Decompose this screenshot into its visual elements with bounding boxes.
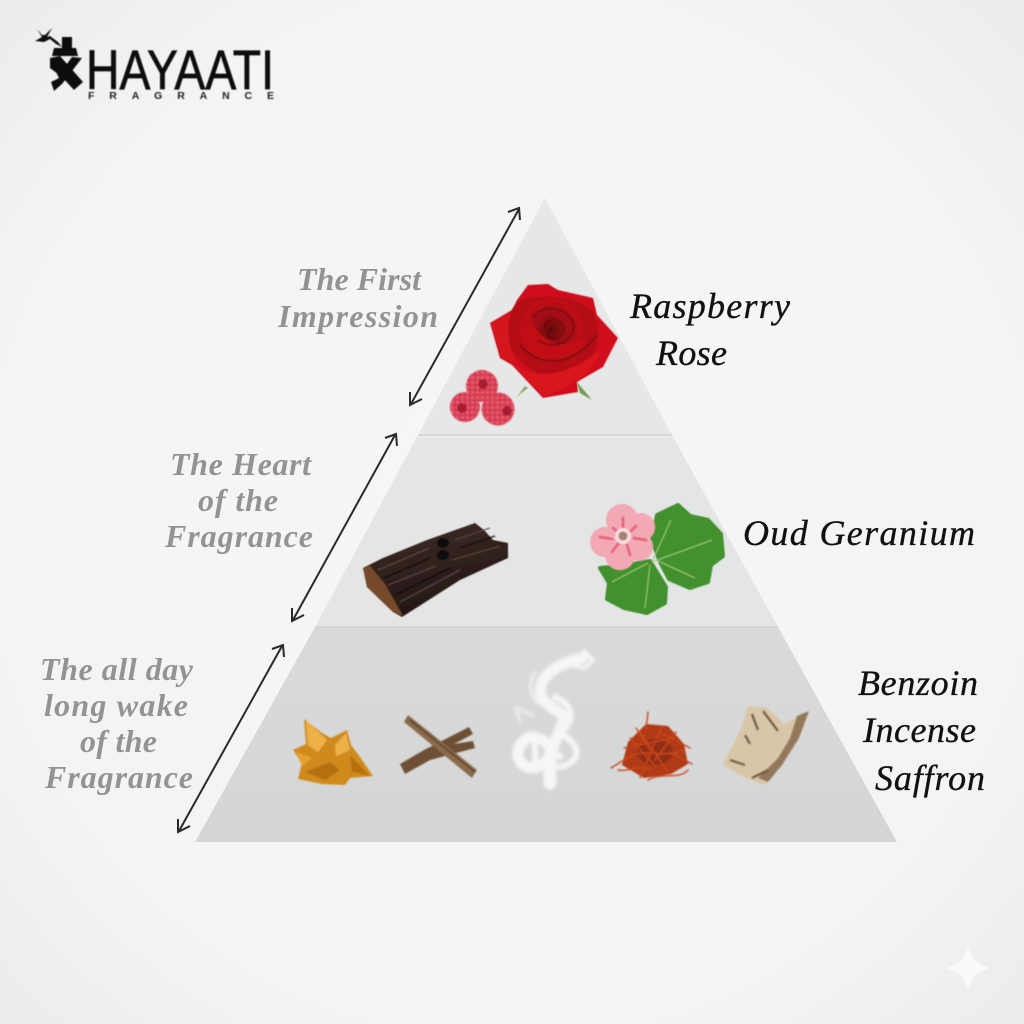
label: The First Impression: Impression [277,298,438,334]
label: The Heart of the Fragrance [164,446,313,554]
icon: rose [490,284,618,400]
label: The all day long wake of the Fragrance: The all day [40,651,194,687]
watermark sparkle [946,946,990,990]
label: The First Impression [277,261,438,334]
notes: Raspberry Rose: Rose [655,333,727,373]
logo wordmark: HAYAATI [86,38,274,101]
pyramid bottom tier [195,627,897,842]
label: The all day long wake of the Fragrance: Fragrance [44,759,193,795]
icon: oud wood [363,523,508,617]
icon: saffron [611,712,692,780]
icon: orris bark [722,706,809,785]
label: The First Impression: The First [297,261,422,297]
logo: Hayaati Fragrance [35,28,274,102]
label: The all day long wake of the Fragrance [40,651,194,795]
logo tagline: FRAGRANCE [88,90,274,102]
label: The Heart of the Fragrance: of the [198,482,278,518]
label: The all day long wake of the Fragrance: long wake [44,687,188,723]
notes: Benzoin Incense Saffron: Saffron [875,758,985,798]
pyramid [195,198,897,842]
icon: cinnamon sticks [400,715,477,778]
arrow: top tier [410,208,520,405]
icon: geranium [590,504,723,613]
pyramid middle tier [315,435,778,627]
logo emblem [35,28,83,91]
notes: Benzoin Incense Saffron [858,663,985,798]
icon: benzoin resin [293,719,373,785]
notes: Raspberry Rose [629,286,790,373]
pyramid top tier [418,198,672,435]
notes: Benzoin Incense Saffron: Incense [862,710,976,750]
notes: Oud Geranium: Oud Geranium [743,513,975,553]
icon: raspberries [450,370,514,426]
label: The Heart of the Fragrance: The Heart [170,446,312,482]
arrow: bottom tier [178,645,284,832]
notes: Benzoin Incense Saffron: Benzoin [858,663,978,703]
label: The all day long wake of the Fragrance: of the [80,723,157,759]
notes: Raspberry Rose: Raspberry [629,286,790,326]
icon: incense smoke [516,651,593,783]
arrow: middle tier [292,434,397,621]
label: The Heart of the Fragrance: Fragrance [164,518,313,554]
